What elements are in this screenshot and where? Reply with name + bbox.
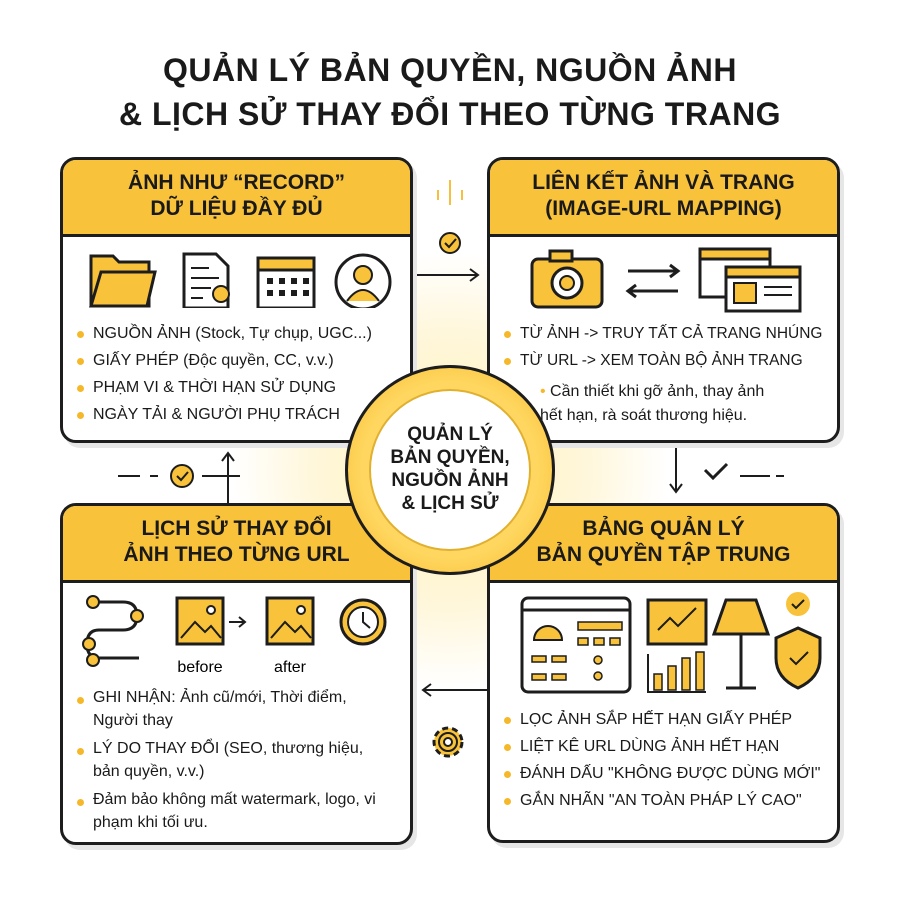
- note: hết hạn, rà soát thương hiệu.: [540, 407, 747, 424]
- icon: gear: [434, 728, 462, 756]
- bullet list: GẮN NHÃN "AN TOÀN PHÁP LÝ CAO": [520, 792, 802, 809]
- bullet list: PHẠM VI & THỜI HẠN SỬ DỤNG: [93, 379, 336, 396]
- bullet list: GIẤY PHÉP (Độc quyền, CC, v.v.): [93, 352, 334, 369]
- icons row: before: [177, 659, 223, 676]
- bullet list: LIỆT KÊ URL DÙNG ẢNH HẾT HẠN: [520, 738, 779, 755]
- heading: DỮ LIỆU ĐẦY ĐỦ: [150, 197, 323, 220]
- icons row: [89, 252, 392, 308]
- center text: NGUỒN ẢNH: [391, 470, 509, 491]
- center text: & LỊCH SỬ: [401, 493, 499, 514]
- bullet list: [504, 710, 820, 809]
- heading: BẢN QUYỀN TẬP TRUNG: [537, 543, 790, 566]
- heading: LIÊN KẾT ẢNH VÀ TRANG: [532, 171, 795, 194]
- note: [540, 383, 764, 424]
- title: QUẢN LÝ BẢN QUYỀN, NGUỒN ẢNH: [163, 52, 737, 88]
- background glow: [230, 250, 670, 690]
- bullet list: ĐÁNH DẤU "KHÔNG ĐƯỢC DÙNG MỚI": [520, 765, 820, 782]
- heading: (IMAGE-URL MAPPING): [545, 197, 782, 220]
- panel: history: [60, 503, 413, 845]
- center text: [369, 389, 531, 551]
- bullet list: LÝ DO THAY ĐỔI (SEO, thương hiệu, bản quyền, v.v.): [93, 740, 363, 780]
- bullet list: GHI NHẬN: Ảnh cũ/mới, Thời điểm, Người thay: [93, 689, 347, 729]
- heading: BẢNG QUẢN LÝ: [582, 517, 745, 540]
- bullet list: NGUỒN ẢNH (Stock, Tự chụp, UGC...): [93, 325, 372, 342]
- panel: record: [60, 157, 413, 443]
- bullet list: Đảm bảo không mất watermark, logo, vi phạm khi tối ưu.: [93, 791, 376, 831]
- heading: ẢNH THEO TỪNG URL: [123, 543, 350, 566]
- heading: [63, 160, 410, 237]
- bullet list: LỌC ẢNH SẮP HẾT HẠN GIẤY PHÉP: [520, 711, 792, 728]
- center hub: [345, 365, 555, 575]
- bullet list: TỪ ẢNH -> TRUY TẤT CẢ TRANG NHÚNG: [520, 325, 822, 342]
- center text: BẢN QUYỀN,: [390, 447, 510, 468]
- title: [119, 52, 781, 132]
- center text: QUẢN LÝ: [407, 424, 493, 445]
- bullet list: [77, 324, 372, 423]
- title: & LỊCH SỬ THAY ĐỔI THEO TỪNG TRANG: [119, 96, 781, 132]
- bullet list: [77, 688, 376, 831]
- icons row: after: [274, 659, 307, 676]
- heading: LỊCH SỬ THAY ĐỔI: [141, 517, 332, 540]
- panel: mapping: [487, 157, 840, 443]
- icons row: [520, 592, 822, 694]
- heading: [63, 506, 410, 583]
- bullet list: NGÀY TẢI & NGƯỜI PHỤ TRÁCH: [93, 406, 340, 423]
- panel: central license table: [487, 503, 840, 843]
- heading: ẢNH NHƯ “RECORD”: [128, 171, 345, 194]
- note: • Cần thiết khi gỡ ảnh, thay ảnh: [540, 383, 764, 400]
- icons row: [82, 595, 386, 676]
- bullet list: [504, 324, 822, 369]
- bullet list: TỪ URL -> XEM TOÀN BỘ ẢNH TRANG: [520, 352, 803, 369]
- heading: [490, 506, 837, 583]
- icons row: [530, 248, 802, 312]
- heading: [490, 160, 837, 237]
